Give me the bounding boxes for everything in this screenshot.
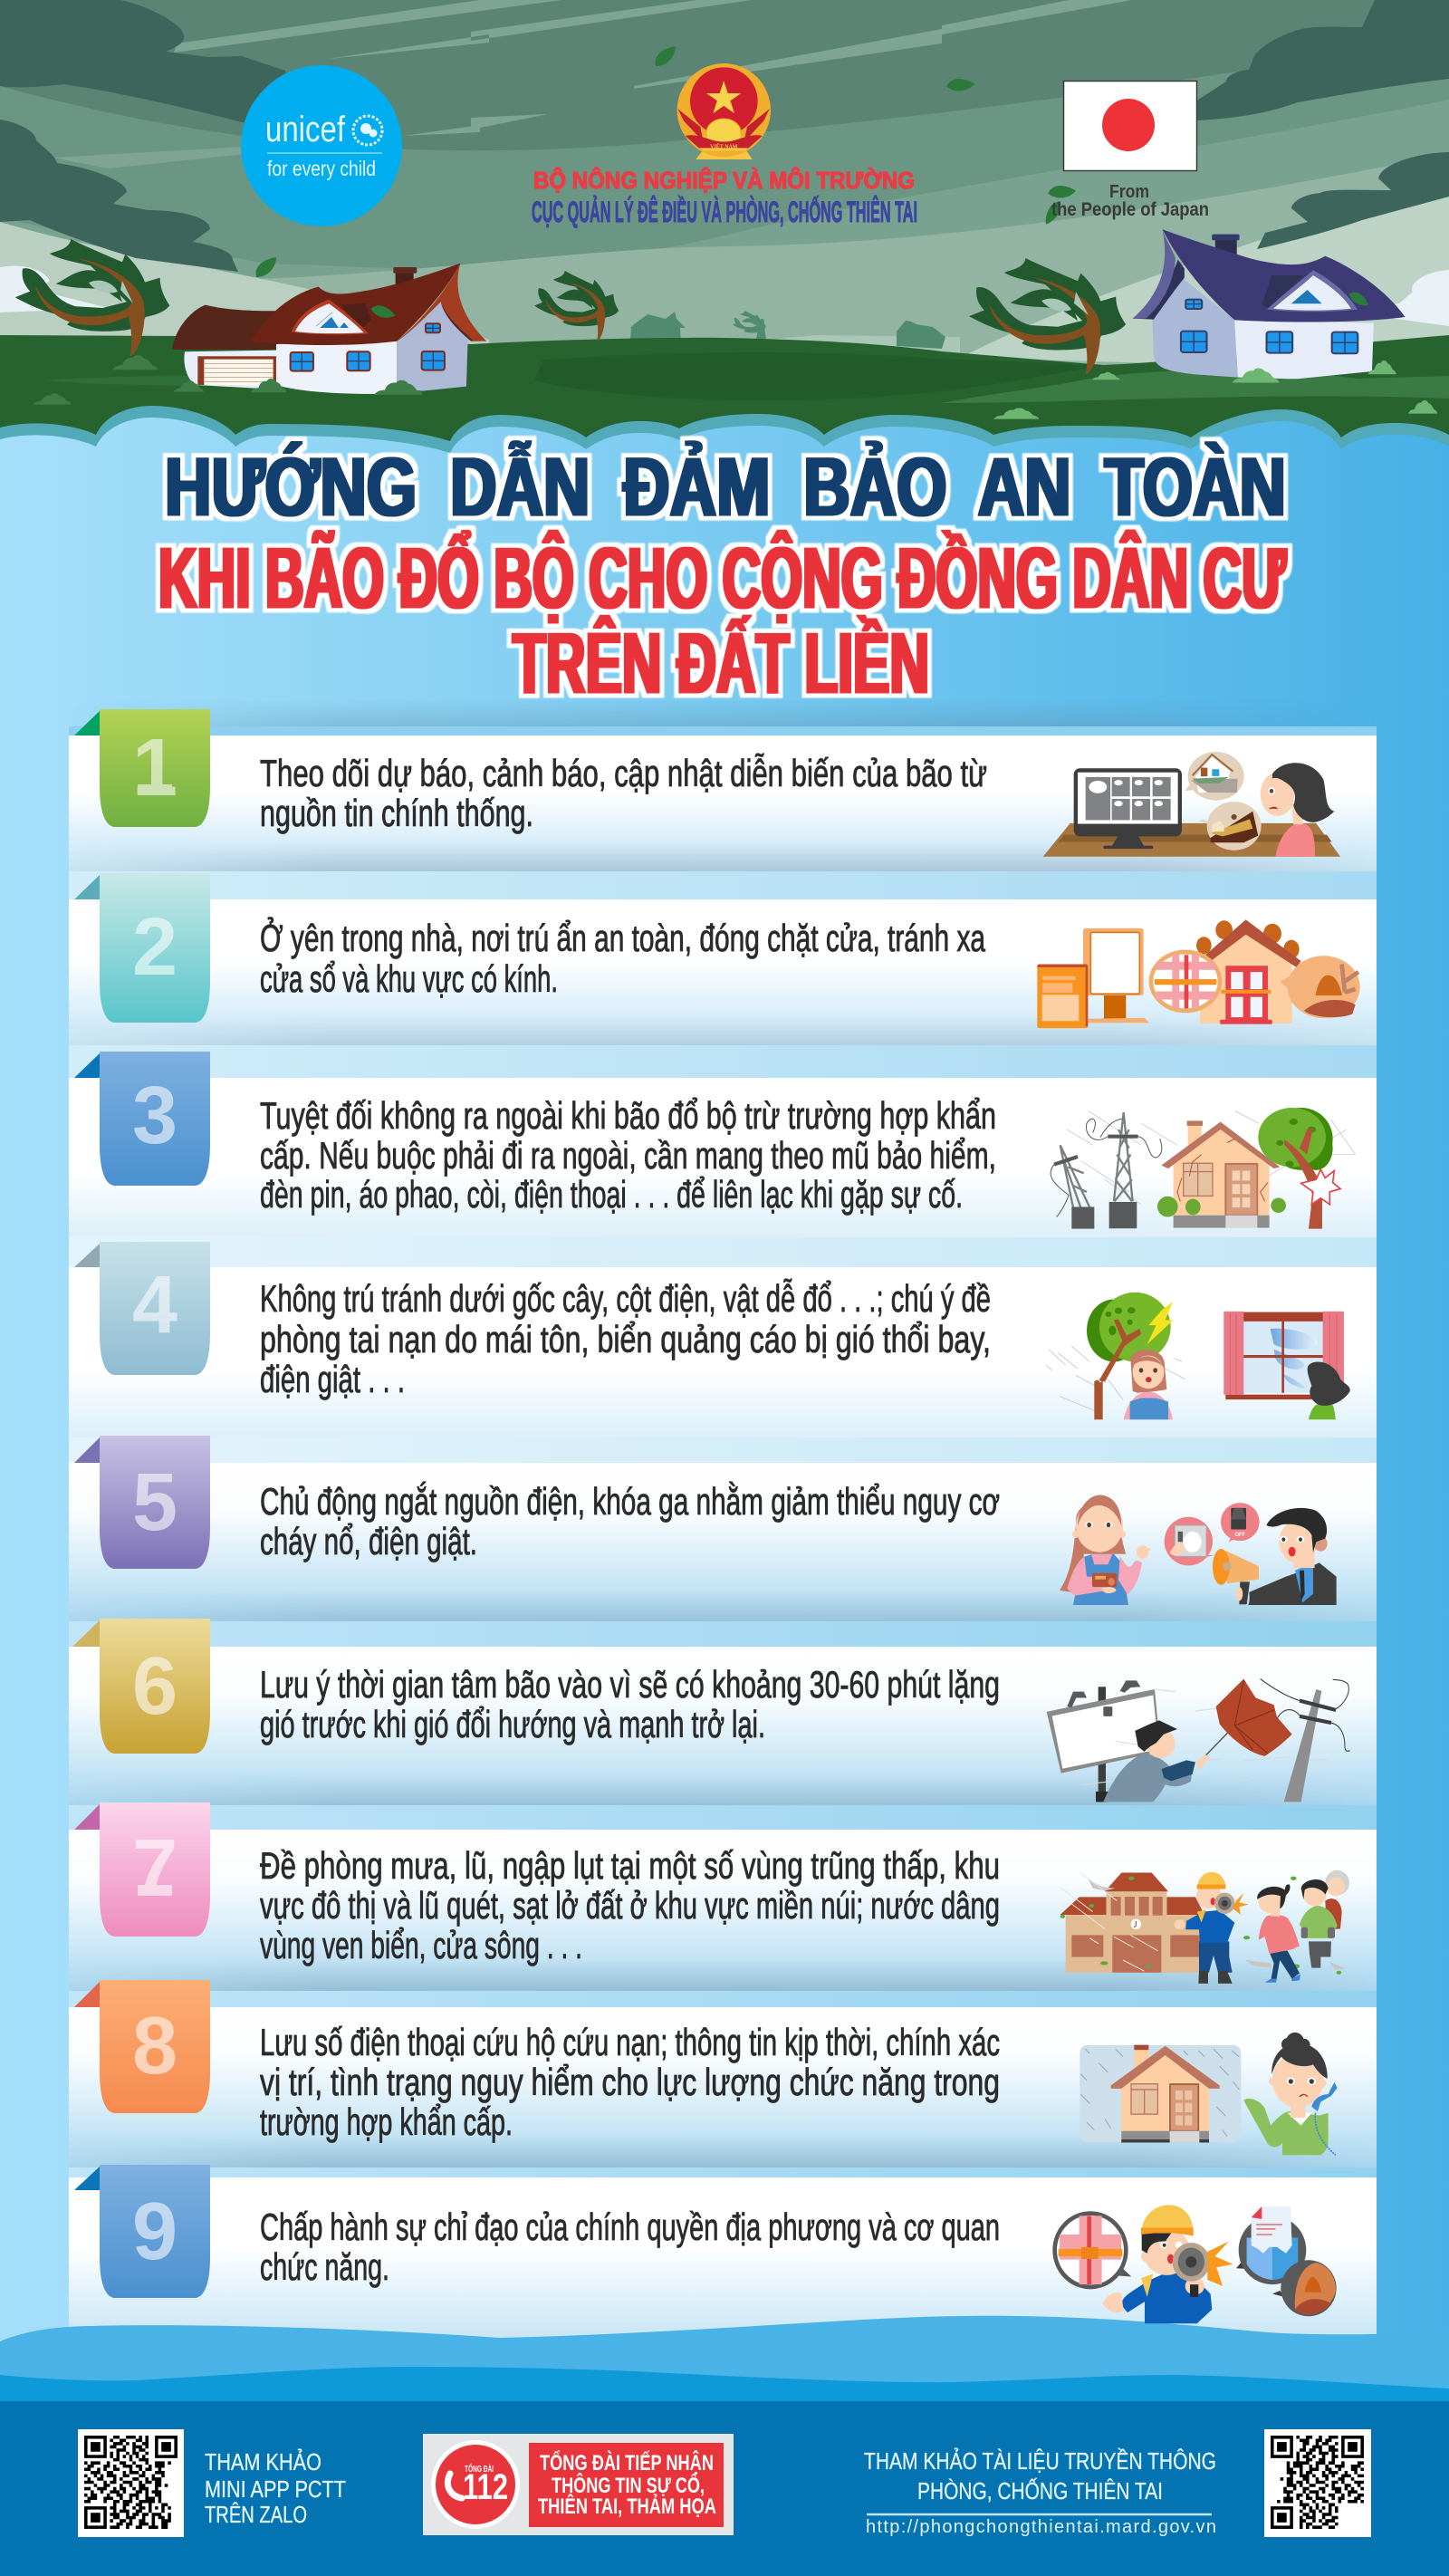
- panel: step 3: Tuyệt đối không ra ngoài khi bão đổ bộ trừ trường hợp khẩn: [260, 1094, 996, 1137]
- panel: step 2: cửa sổ và khu vực có kính.: [260, 957, 558, 1000]
- icon: woman under tree and tornado through window: [1046, 1293, 1350, 1419]
- bottom waves: [0, 2316, 1449, 2409]
- panel: step 8: vị trí, tình trạng nguy hiểm cho lực lượng chức năng trong: [260, 2061, 1000, 2103]
- panel: step 6: 6: [132, 1641, 178, 1732]
- icon: woman with radio and man with megaphone: OFF: [1235, 1531, 1245, 1538]
- panel: step 7: vực đô thị và lũ quét, sạt lở đất ở khu vực miền núi; nước dâng: [260, 1884, 1000, 1927]
- panel: step 2: Ở yên trong nhà, nơi trú ẩn an toàn, đóng chặt cửa, tránh xa: [260, 916, 985, 959]
- QR code: mini app: [78, 2429, 184, 2537]
- panel: step 8: Lưu số điện thoại cứu hộ cứu nạn; thông tin kịp thời, chính xác: [260, 2021, 1000, 2063]
- panel: step 2: [69, 871, 1377, 1045]
- panel: step 1: [69, 709, 1377, 871]
- house: red roof: [34, 264, 486, 405]
- trees: [15, 239, 1126, 374]
- panel: step 3: [69, 1045, 1377, 1237]
- panel: step 9: Chấp hành sự chỉ đạo của chính quyền địa phương và cơ quan: [260, 2206, 1000, 2248]
- panel: step 6: gió trước khi gió đổi hướng và mạnh trở lại.: [260, 1703, 765, 1745]
- footer text: mini app: THAM KHẢO: [205, 2448, 321, 2475]
- panel: step 1: nguồn tin chính thống.: [260, 792, 533, 834]
- panel: step 8: [69, 1980, 1377, 2167]
- panel: step 1: Theo dõi dự báo, cảnh báo, cập nhật diễn biến của bão từ: [260, 752, 987, 794]
- panel: step 4: điện giật . . .: [260, 1358, 405, 1400]
- icon: house in rain and woman on phone: [1080, 2033, 1338, 2155]
- panel: step 9: [69, 2165, 1377, 2346]
- panel: step 3: 3: [132, 1071, 178, 1161]
- icon: monitor with weather forecast and worried woman: [1043, 752, 1340, 857]
- panel: step 3: đèn pin, áo phao, còi, điện thoại . . . để liên lạc khi gặp sự cố.: [260, 1173, 963, 1216]
- hotline 112 banner: THÔNG TIN SỰ CỐ,: [552, 2473, 705, 2498]
- header scene: distant silhouettes: [630, 311, 945, 349]
- panel: step 7: [69, 1802, 1377, 1991]
- footer text: reference documents: [864, 2447, 1216, 2537]
- shadow above first panel: [69, 706, 1377, 735]
- footer text: reference documents: THAM KHẢO TÀI LIỆU TRUYỀN THÔNG: [864, 2447, 1216, 2475]
- logo: unicef: for every child: [267, 157, 376, 180]
- ministry name: CỤC QUẢN LÝ ĐÊ ĐIỀU VÀ PHÒNG, CHỐNG THIÊN TAI: [532, 196, 917, 228]
- footer text: mini app: MINI APP PCTT: [205, 2475, 346, 2503]
- panel: step 9: chức năng.: [260, 2245, 389, 2288]
- panel: step 3: cấp. Nếu buộc phải đi ra ngoài, cần mang theo mũ bảo hiểm,: [260, 1134, 996, 1177]
- title: [158, 440, 1286, 712]
- panel: step 8: 8: [132, 2001, 178, 2091]
- icon: building, rescuer and evacuating family: [1060, 1870, 1349, 1984]
- icon: sign, house and sandbags: [1037, 919, 1360, 1028]
- logo: Japan flag: [1051, 82, 1209, 220]
- panel: step 5: cháy nổ, điện giật.: [260, 1520, 477, 1562]
- panel: step 4: Không trú tránh dưới gốc cây, cột điện, vật dễ đổ . . .; chú ý đề: [260, 1277, 991, 1320]
- icon: broken towers, cracked house and tree: [1051, 1108, 1356, 1229]
- panel: step 4: phòng tai nạn do mái tôn, biển quảng cáo bị gió thổi bay,: [260, 1318, 991, 1360]
- panel: step 1: 1: [132, 723, 178, 813]
- footer text: mini app: TRÊN ZALO: [205, 2501, 307, 2528]
- flying leaves: [256, 46, 1368, 324]
- panel: step 9: 9: [132, 2187, 178, 2277]
- house: blue roof: [993, 229, 1437, 419]
- panel: step 7: Đề phòng mưa, lũ, ngập lụt tại một số vùng trũng thấp, khu: [260, 1844, 1000, 1887]
- icon: woman with radio and man with megaphone: [1060, 1495, 1337, 1605]
- QR code: website: [1264, 2429, 1371, 2537]
- footer band: [0, 2401, 1449, 2576]
- logo: Japan flag: From: [1109, 182, 1149, 202]
- header scene: stormy sky: [0, 0, 1449, 453]
- ministry name: BỘ NÔNG NGHIỆP VÀ MÔI TRƯỜNG: [533, 167, 915, 194]
- icon: man with umbrella in wind near billboard and pole: [1047, 1678, 1350, 1802]
- footer text: reference documents: PHÒNG, CHỐNG THIÊN TAI: [917, 2477, 1163, 2504]
- water scalloped edge: [0, 406, 1449, 573]
- logo: Vietnam state emblem: [677, 63, 771, 159]
- panel: step 5: Chủ động ngắt nguồn điện, khóa ga nhằm giảm thiểu nguy cơ: [260, 1480, 1000, 1523]
- logo: Japan flag: the People of Japan: [1051, 199, 1209, 220]
- hotline 112 banner: TỔNG ĐÀI TIẾP NHẬN: [540, 2450, 714, 2475]
- header scene: green land: [0, 335, 1449, 471]
- panel: step 5: 5: [132, 1457, 178, 1548]
- footer text: mini app: [205, 2448, 346, 2528]
- panel: step 5: [69, 1436, 1377, 1621]
- logo: unicef: unicef: [265, 110, 346, 149]
- title: TRÊN ĐẤT LIỀN: [513, 614, 929, 712]
- panel: step 6: [69, 1619, 1377, 1805]
- logo: Vietnam state emblem: VIỆT NAM: [710, 142, 738, 149]
- panel: step 6: Lưu ý thời gian tâm bão vào vì sẽ có khoảng 30-60 phút lặng: [260, 1663, 1000, 1706]
- icon: rescuer with megaphone and speech bubbles: [1055, 2205, 1337, 2323]
- hotline 112 banner: [423, 2434, 734, 2535]
- panel: step 2: 2: [132, 902, 178, 993]
- ministry name: [532, 167, 917, 228]
- panel: step 4: 4: [132, 1260, 178, 1350]
- panel: step 7: vùng ven biển, cửa sông . . .: [260, 1924, 582, 1966]
- hotline 112 banner: TỔNG ĐÀI: [465, 2463, 494, 2475]
- hotline 112 banner: THIÊN TAI, THẢM HỌA: [538, 2493, 716, 2519]
- panel: step 7: 7: [132, 1823, 178, 1914]
- logo: unicef: [241, 65, 402, 226]
- panel: step 8: trường hợp khẩn cấp.: [260, 2100, 513, 2143]
- footer text: reference documents: http://phongchongthientai.mard.gov.vn: [866, 2517, 1216, 2537]
- panel: step 4: [69, 1237, 1377, 1437]
- hotline 112 banner: 112: [463, 2467, 508, 2507]
